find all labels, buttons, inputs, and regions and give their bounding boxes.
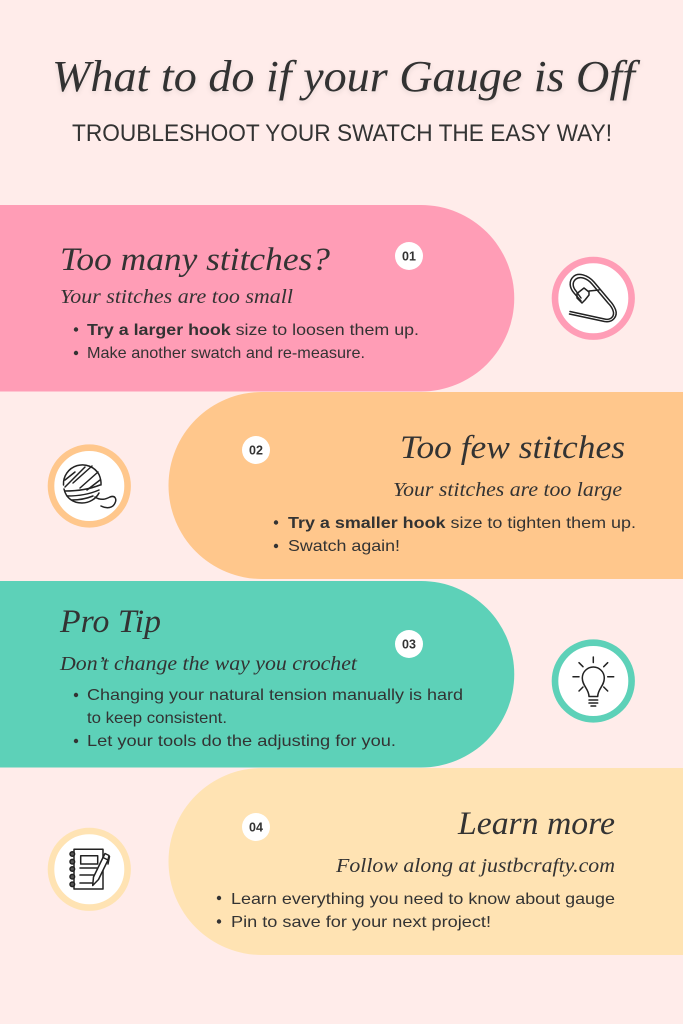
bullet list: learn more: Pin to save for your next project! [231,914,491,931]
bullet list: too many stitches: Try a larger hook size to loosen them up. [87,322,419,339]
number badge 03 [395,630,423,658]
bullet list: too many stitches: Make another swatch and re-measure. [87,345,365,362]
subheading: don't change: Don’t change the way you crochet [59,653,358,675]
heading: too few stitches: Too few stitches [400,430,625,466]
number badge 04: 04 [249,820,263,834]
bullet list: learn more: Learn everything you need to know about gauge [231,891,615,908]
heading: learn more: Learn more [457,806,615,842]
panel: learn more [168,768,683,955]
number badge 03: 03 [402,638,416,652]
title: What to do if your Gauge is Off [52,52,641,101]
panel: pro tip [0,581,514,768]
bullet list: pro tip: Let your tools do the adjusting for you. [87,733,396,750]
panel: too many stitches [0,205,514,392]
bullet list: learn more [217,891,615,931]
heading: too many stitches: Too many stitches? [60,242,331,278]
bullet list: too few stitches: Swatch again! [288,538,400,555]
bullet list: pro tip: Changing your natural tension manually is hard [87,687,463,704]
number badge 01 [395,242,423,270]
subheading: stitches too small: Your stitches are too small [60,286,293,308]
bullet list: too few stitches [274,515,636,555]
panel: too few stitches [168,392,683,579]
icon: stitch marker [555,260,632,337]
bullet list: pro tip: to keep consistent. [87,710,227,727]
number badge 02: 02 [249,444,263,458]
icon: yarn ball [51,448,128,524]
heading: pro tip: Pro Tip [59,604,161,640]
subheading: stitches too large: Your stitches are too large [393,479,622,501]
icon: light bulb [555,643,632,719]
bullet list: too many stitches [74,322,419,362]
subheading: follow along: Follow along at justbcrafty.com [335,855,615,877]
number badge 04 [242,813,270,841]
bullet list: pro tip [74,687,463,750]
bullet list: too few stitches: Try a smaller hook size to tighten them up. [288,515,636,532]
subtitle: TROUBLESHOOT YOUR SWATCH THE EASY WAY! [72,120,612,147]
number badge 02 [242,436,270,464]
number badge 01: 01 [402,250,416,264]
icon: notebook and pen [51,831,128,908]
